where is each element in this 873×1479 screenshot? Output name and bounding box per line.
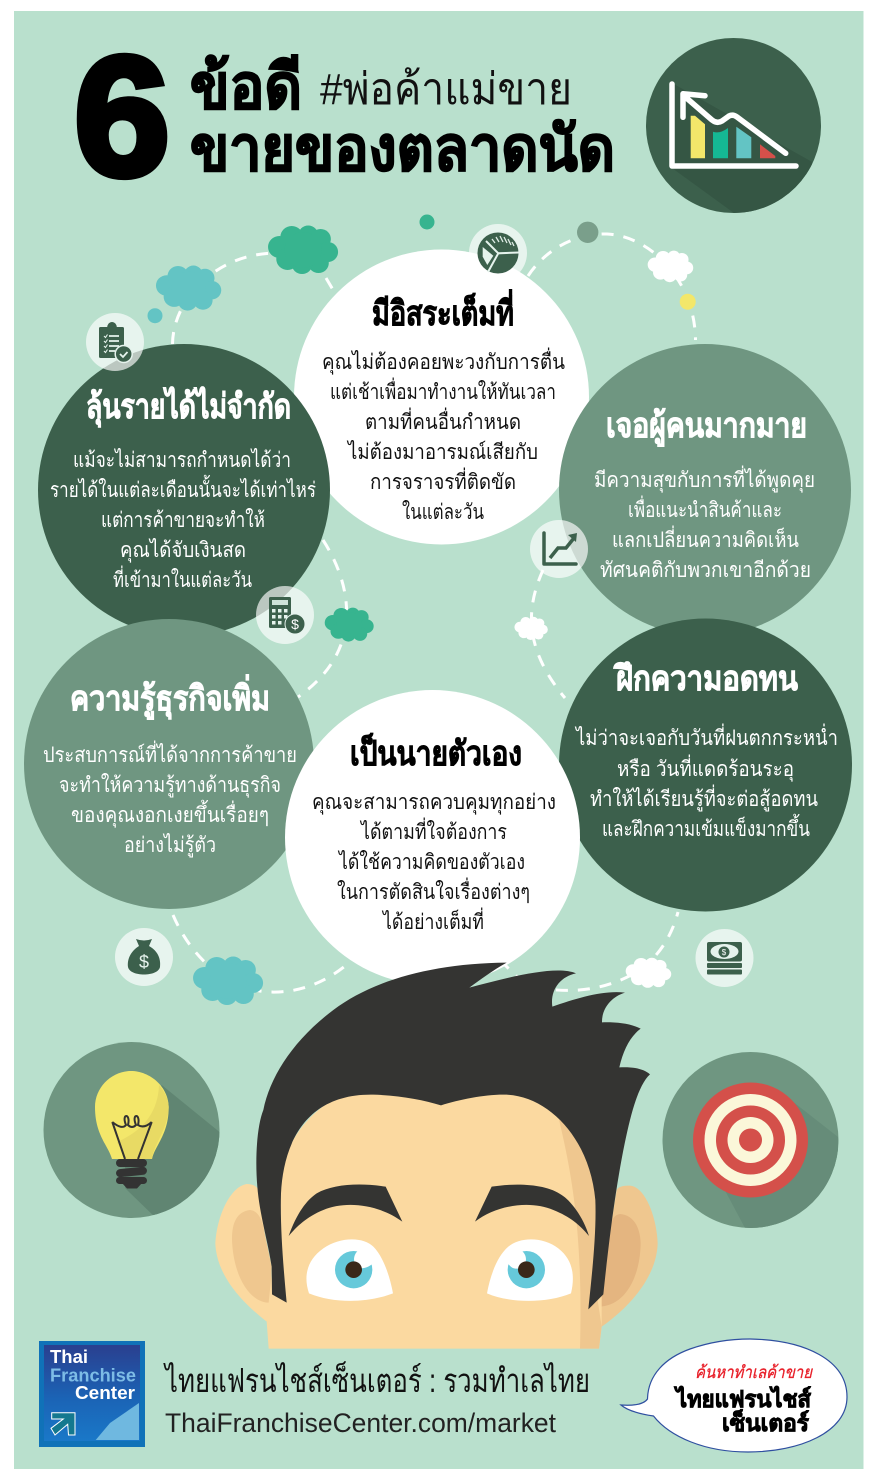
heading: ลุ้นรายได้ไม่จำกัด bbox=[86, 386, 291, 428]
body text: รายได้ในแต่ละเดือนนั้นจะได้เท่าไหร่ bbox=[50, 475, 316, 502]
icon: pie chart bbox=[469, 224, 527, 282]
dark circle: unlimited income bbox=[38, 344, 330, 636]
icon: target badge bbox=[662, 1052, 838, 1228]
logo: Thai Franchise Center: Thai bbox=[50, 1347, 88, 1367]
body text: แต่เช้าเพื่อมาทำงานให้ทันเวลา bbox=[330, 377, 556, 404]
heading: ฝึกความอดทน bbox=[613, 660, 798, 698]
footer heading: ไทยแฟรนไชส์เซ็นเตอร์ : รวมทำเลไทย bbox=[163, 1361, 590, 1399]
speech bubble: ค้นหาทำเลค้าขาย bbox=[695, 1363, 813, 1382]
body text: ได้ตามที่ใจต้องการ bbox=[359, 817, 507, 844]
right eyebrow bbox=[475, 1185, 589, 1236]
logo: Thai Franchise Center bbox=[39, 1341, 145, 1447]
face shadow bbox=[558, 1117, 602, 1349]
left eyebrow bbox=[289, 1185, 402, 1236]
decorative dots and clouds bbox=[148, 214, 696, 1005]
right ear bbox=[597, 1186, 658, 1327]
title: ข้อดี bbox=[190, 53, 302, 122]
body text: ในการตัดสินใจเรื่องต่างๆ bbox=[337, 877, 530, 904]
character head bbox=[215, 963, 658, 1349]
title: #พ่อค้าแม่ขาย bbox=[320, 65, 572, 114]
medium circle: business knowledge bbox=[24, 619, 314, 909]
icon: rising chart bbox=[530, 520, 588, 578]
body text: ในแต่ละวัน bbox=[402, 500, 484, 524]
body text: ไม่ว่าจะเจอกับวันที่ฝนตกกระหน่ำ bbox=[574, 723, 838, 750]
white circle: be your own boss bbox=[285, 690, 580, 985]
body text bbox=[574, 723, 838, 841]
body text: อย่างไม่รู้ตัว bbox=[124, 833, 216, 858]
dark circle: patience bbox=[559, 618, 852, 912]
speech bubble bbox=[621, 1339, 847, 1452]
speech bubble: เซ็นเตอร์ bbox=[722, 1408, 810, 1436]
body text: ที่เข้ามาในแต่ละวัน bbox=[113, 565, 252, 592]
body text: ทัศนคติกับพวกเขาอีกด้วย bbox=[600, 559, 811, 582]
body text bbox=[594, 465, 815, 582]
title bbox=[74, 22, 615, 212]
title: 6 bbox=[74, 22, 170, 212]
icon: cash stack: $ bbox=[722, 948, 727, 957]
dashed connector paths bbox=[172, 234, 696, 992]
logo: Thai Franchise Center: Franchise bbox=[50, 1366, 136, 1386]
face bbox=[267, 1090, 602, 1349]
right inner ear bbox=[598, 1214, 641, 1307]
body text: ตามที่คนอื่นกำหนด bbox=[365, 407, 521, 434]
medium circle: meet people bbox=[559, 344, 851, 636]
body text: แม้จะไม่สามารถกำหนดได้ว่า bbox=[73, 448, 291, 472]
icon: calculator: $ bbox=[291, 616, 299, 632]
body text: แลกเปลี่ยนความคิดเห็น bbox=[612, 525, 799, 552]
white circle: freedom bbox=[294, 250, 589, 544]
body text: แต่การค้าขายจะทำให้ bbox=[101, 508, 265, 532]
left eye bbox=[306, 1239, 393, 1301]
footer url: ThaiFranchiseCenter.com/market bbox=[165, 1408, 556, 1438]
heading: เจอผู้คนมากมาย bbox=[606, 407, 807, 447]
body text bbox=[43, 740, 297, 858]
body text: ประสบการณ์ที่ได้จากการค้าขาย bbox=[43, 740, 297, 767]
body text: เพื่อแนะนำสินค้าและ bbox=[628, 495, 782, 522]
icon: calculator bbox=[256, 586, 314, 644]
body text: จะทำให้ความรู้ทางด้านธุรกิจ bbox=[59, 773, 281, 798]
body text: คุณไม่ต้องคอยพะวงกับการตื่น bbox=[322, 347, 565, 375]
body text: มีความสุขกับการที่ได้พูดคุย bbox=[594, 465, 815, 493]
heading: มีอิสระเต็มที่ bbox=[372, 289, 514, 333]
body text: การจราจรที่ติดขัด bbox=[370, 467, 516, 494]
heading: เป็นนายตัวเอง bbox=[350, 732, 522, 773]
title: ขายของตลาดนัด bbox=[190, 115, 615, 184]
body text: คุณได้จับเงินสด bbox=[120, 538, 246, 563]
body text: ทำให้ได้เรียนรู้ที่จะต่อสู้อดทน bbox=[590, 784, 818, 812]
logo: Thai Franchise Center: Center bbox=[75, 1383, 135, 1403]
icon: money bag bbox=[115, 928, 173, 986]
body text: ได้อย่างเต็มที่ bbox=[381, 907, 484, 934]
body text bbox=[50, 448, 316, 592]
speech bubble: ไทยแฟรนไชส์ bbox=[673, 1385, 812, 1412]
icon: money bag: $ bbox=[139, 952, 149, 972]
left ear bbox=[215, 1184, 272, 1322]
body text bbox=[322, 347, 565, 524]
icon: cash stack bbox=[696, 929, 754, 987]
icon: clipboard bbox=[86, 313, 144, 371]
body text: ได้ใช้ความคิดของตัวเอง bbox=[337, 850, 525, 874]
left inner ear bbox=[232, 1210, 272, 1303]
heading: ความรู้ธุรกิจเพิ่ม bbox=[70, 674, 270, 720]
body text: ของคุณงอกเงยขึ้นเรื่อยๆ bbox=[71, 800, 269, 828]
body text: หรือ วันที่แดดร้อนระอุ bbox=[617, 754, 794, 782]
hair bbox=[256, 963, 650, 1309]
right eye bbox=[487, 1239, 573, 1301]
body text bbox=[312, 791, 556, 934]
body text: คุณจะสามารถควบคุมทุกอย่าง bbox=[312, 791, 556, 815]
icon: light bulb badge bbox=[44, 1042, 225, 1225]
icon: falling chart badge bbox=[646, 38, 825, 215]
body text: ไม่ต้องมาอารมณ์เสียกับ bbox=[346, 440, 538, 464]
body text: และฝึกความเข้มแข็งมากขึ้น bbox=[602, 814, 810, 841]
